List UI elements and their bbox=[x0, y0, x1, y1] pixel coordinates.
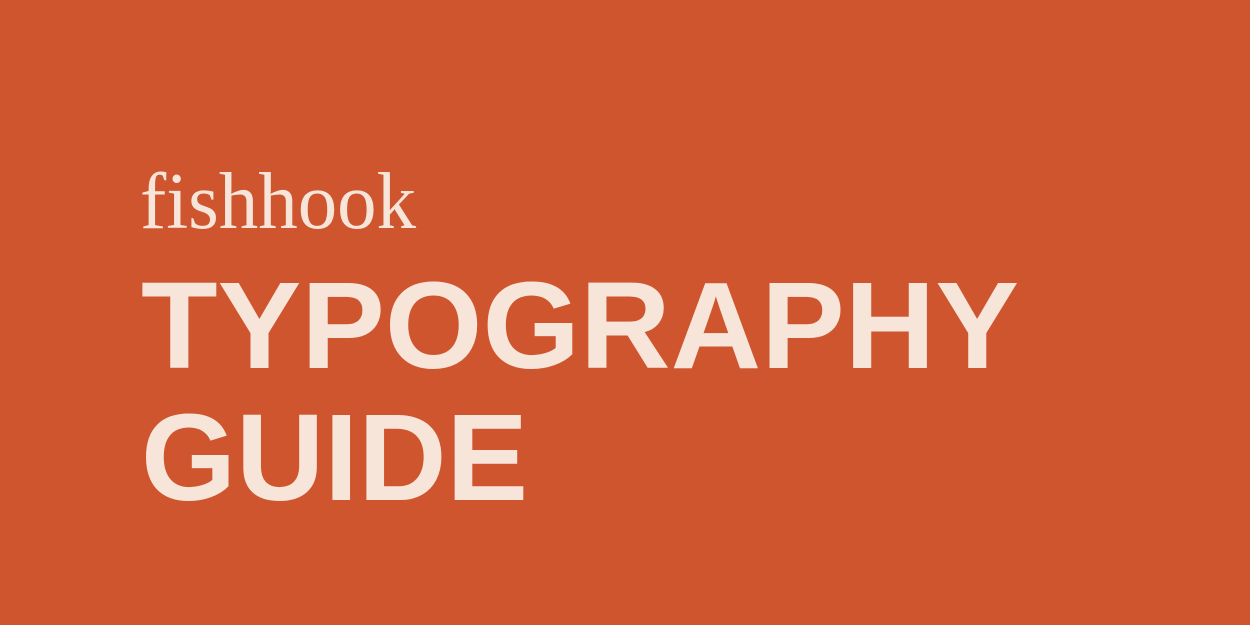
logo: fishhook: fishhook bbox=[140, 158, 416, 246]
title: TYPOGRAPHY: TYPOGRAPHY bbox=[141, 258, 1019, 395]
title: GUIDE: GUIDE bbox=[141, 390, 528, 527]
